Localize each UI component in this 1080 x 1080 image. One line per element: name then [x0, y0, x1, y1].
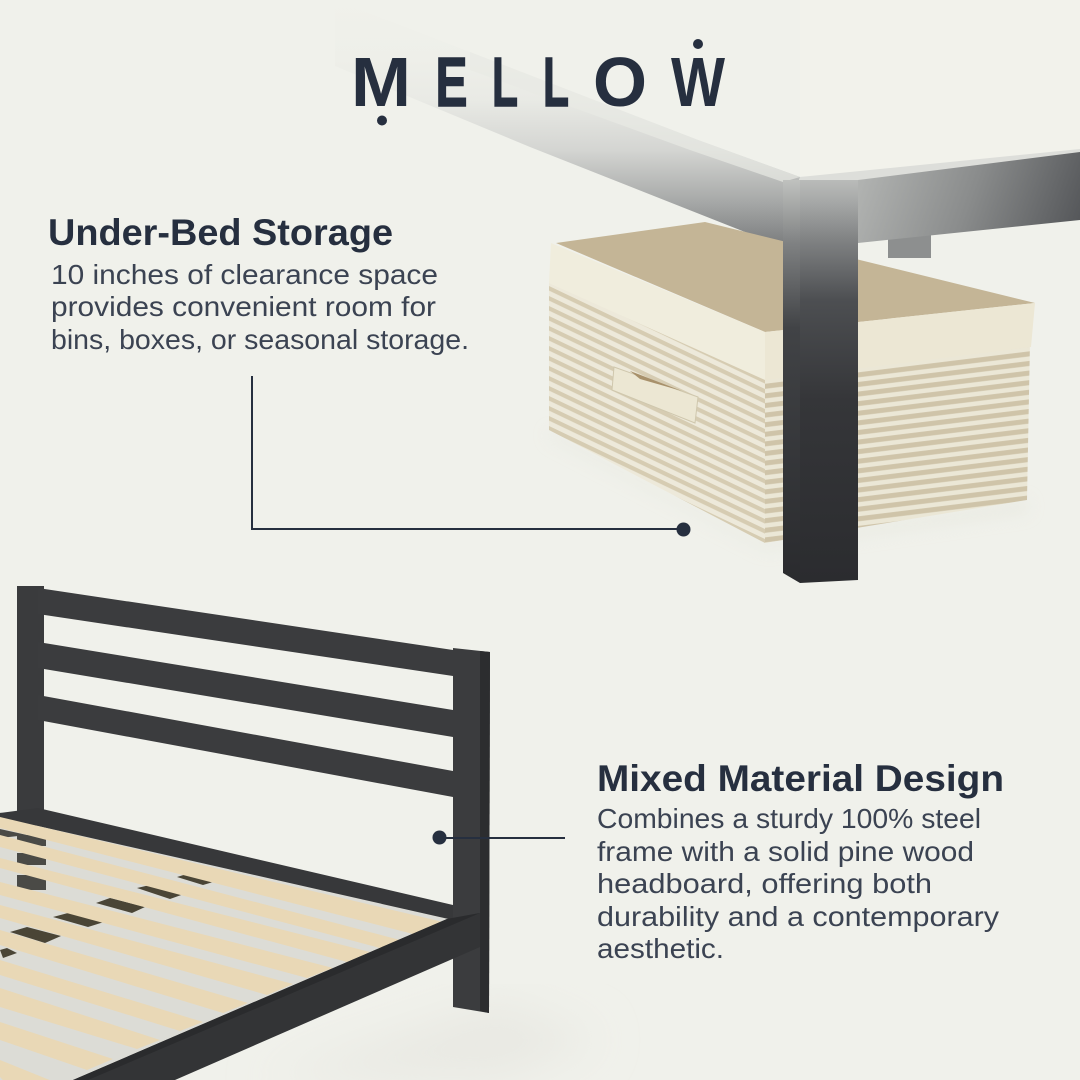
box striped right side: [765, 342, 1030, 543]
heading: Mixed Material Design: Mixed Material Design: [597, 758, 1004, 799]
logo: MELLOW: O: [593, 43, 647, 121]
text block: mixed material description: [597, 803, 999, 964]
callout line: storage: [252, 376, 690, 536]
logo: MELLOW: L: [492, 43, 518, 121]
left headboard post: [17, 586, 44, 811]
text block: mixed material description: Combines a sturdy 100% steel: [597, 803, 981, 834]
floor shadow: [260, 1000, 600, 1080]
head rail of frame: [0, 808, 453, 920]
text block: under-bed storage description: [51, 259, 469, 355]
photo: headboard and slatted bed frame: [0, 586, 600, 1080]
text block: mixed material description: aesthetic.: [597, 933, 724, 964]
right bed rail: [858, 151, 1080, 243]
center support seen through slats: [0, 873, 220, 958]
text block: under-bed storage description: 10 inches of clearance space: [51, 259, 438, 290]
box cream folded band: [549, 243, 765, 380]
heading: Under-Bed Storage: Under-Bed Storage: [48, 212, 393, 253]
right headboard post: [453, 648, 490, 1013]
text block: mixed material description: frame with a solid pine wood: [597, 836, 974, 867]
storage box: [549, 222, 1035, 550]
left bed rail fading upward: [335, 0, 800, 247]
text block: under-bed storage description: provides convenient room for: [51, 291, 436, 322]
text block: under-bed storage description: bins, boxes, or seasonal storage.: [51, 324, 469, 355]
box lid interior: [556, 222, 1035, 332]
text block: mixed material description: durability and a contemporary: [597, 901, 999, 932]
callout line: headboard: [432, 830, 565, 844]
wooden slats: [0, 817, 443, 1080]
logo: MELLOW: L: [543, 43, 569, 121]
side rail of frame: [73, 913, 480, 1080]
rear bed leg: [888, 220, 931, 258]
front bed leg: [783, 180, 858, 583]
headboard rails: [38, 588, 453, 797]
box striped left side: [549, 283, 765, 543]
logo: MELLOW: W: [671, 43, 725, 121]
logo: MELLOW: E: [436, 43, 468, 121]
box shadow: [549, 430, 1028, 550]
mattress: [800, 0, 1080, 176]
photo: bed corner with under-bed storage box: [335, 0, 1080, 583]
logo: MELLOW: M: [351, 43, 411, 121]
space between slats: [0, 812, 452, 1080]
text block: mixed material description: headboard, offering both: [597, 868, 932, 899]
logo: MELLOW: [351, 39, 725, 126]
box handle: [612, 367, 698, 423]
